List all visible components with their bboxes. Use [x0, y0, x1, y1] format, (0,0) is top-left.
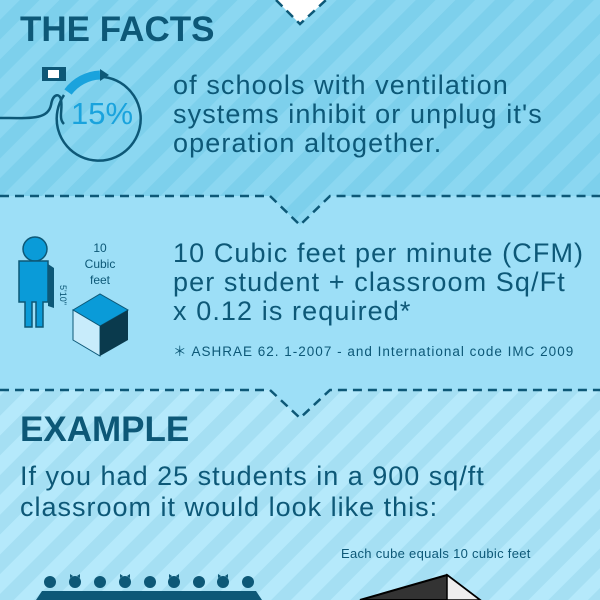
text: ventilation fact: systems inhibit or unplug it's [173, 99, 543, 129]
text: example description: classroom it would look like this: [20, 492, 438, 522]
icon: students row [36, 574, 262, 600]
text: ventilation fact: of schools with ventilation [173, 70, 509, 100]
icon: person and cube: feet [90, 273, 111, 287]
title: the facts: THE FACTS [20, 10, 214, 49]
text: CFM requirement: per student + classroom Sq/Ft [173, 267, 566, 297]
icon: person and cube: 5'10" [58, 285, 68, 305]
footnote: ＊ ASHRAE 62. 1-2007 - and International code IMC 2009 [173, 344, 574, 359]
text: CFM requirement [173, 238, 584, 326]
icon: person and cube [18, 236, 129, 357]
icon: person and cube: Cubic [85, 257, 115, 271]
text: example description: If you had 25 students in a 900 sq/ft [20, 461, 485, 491]
caption: cube: Each cube equals 10 cubic feet [341, 546, 531, 561]
text: ventilation fact [173, 70, 543, 158]
text: ventilation fact: operation altogether. [173, 128, 442, 158]
icon: building cube [360, 574, 482, 600]
title: example: EXAMPLE [20, 410, 189, 449]
text: example description [20, 461, 485, 522]
text: CFM requirement: x 0.12 is required* [173, 296, 412, 326]
icon: unplugged cord 15% [0, 67, 142, 162]
text: CFM requirement: 10 Cubic feet per minute (CFM) [173, 238, 584, 268]
icon: unplugged cord 15%: 15% [71, 96, 133, 131]
icon: person and cube: 10 [93, 241, 107, 255]
